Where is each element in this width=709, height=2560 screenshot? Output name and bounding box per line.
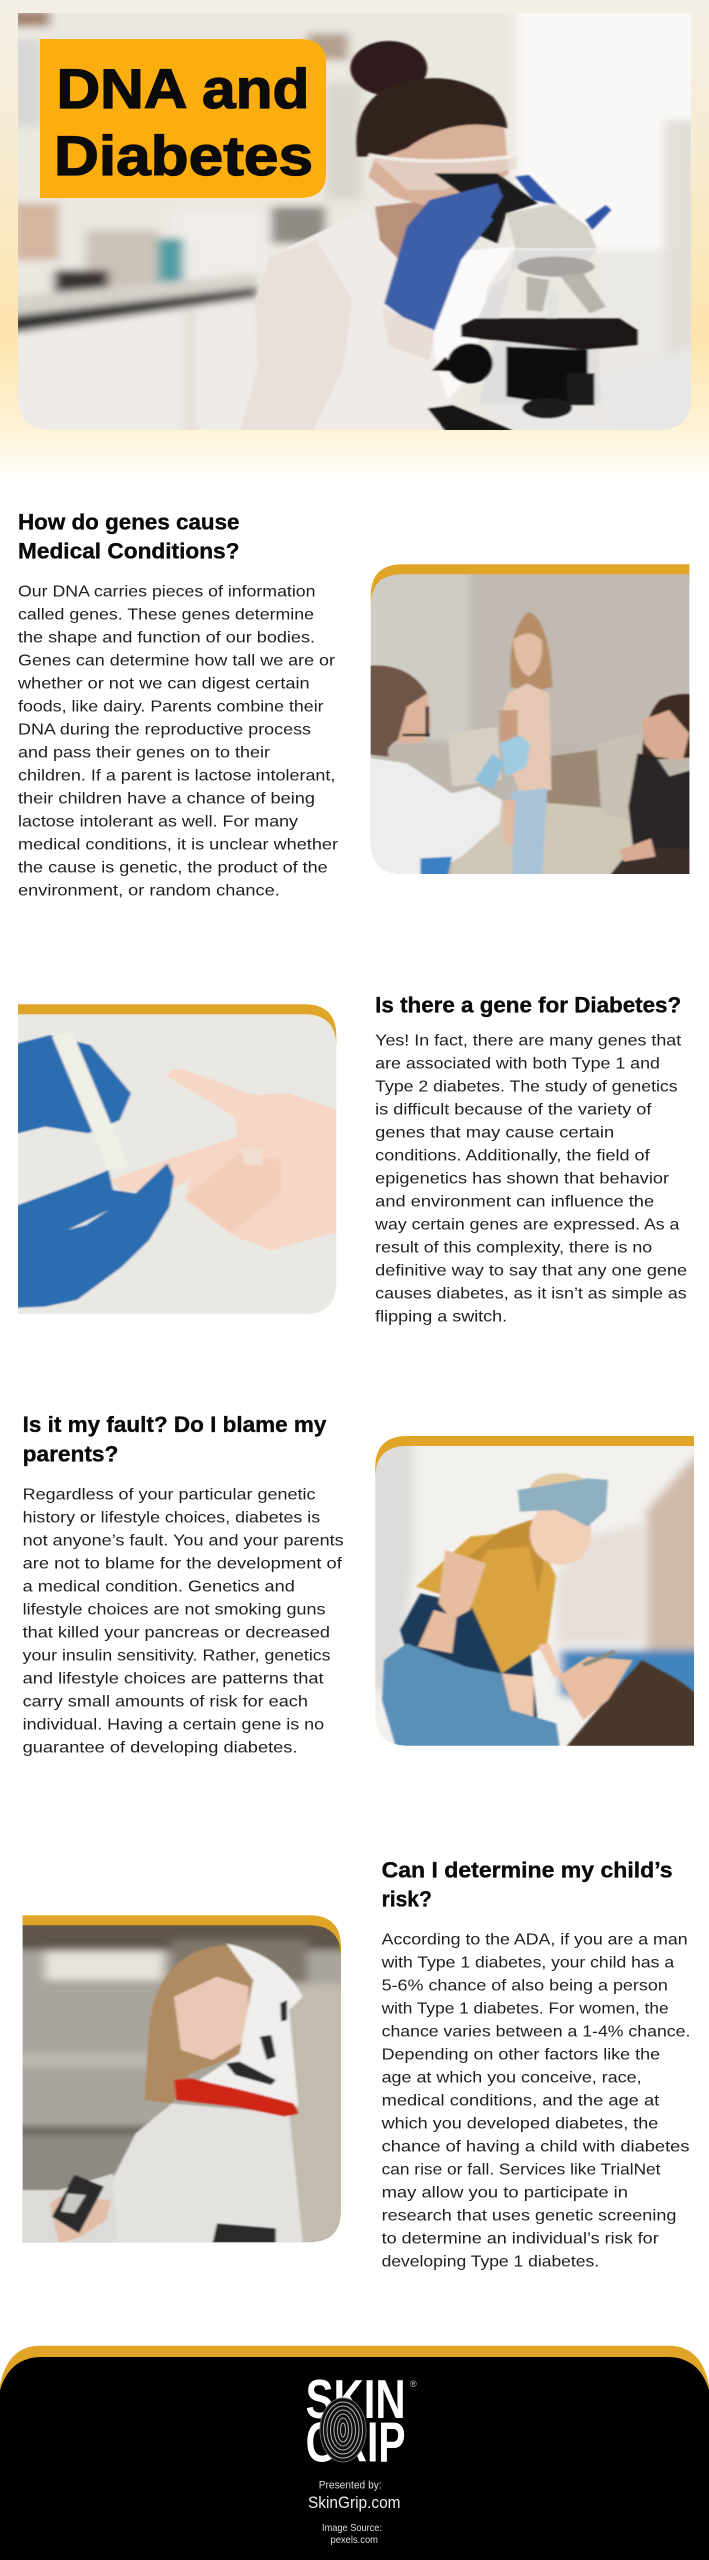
image source text: Image Source: xyxy=(322,2522,382,2534)
body text: chance of having a child with diabetes xyxy=(382,2139,690,2156)
body text: a medical condition. Genetics and xyxy=(23,1578,295,1595)
body text: may allow you to participate in xyxy=(382,2185,628,2202)
body text: definitive way to say that any one gene xyxy=(375,1263,687,1280)
body text: with Type 1 diabetes. For women, the xyxy=(381,2001,669,2018)
body text: environment, or random chance. xyxy=(18,883,280,900)
body text: and environment can influence the xyxy=(375,1194,654,1211)
heading xyxy=(18,509,239,564)
logo: Skin Grip xyxy=(306,2368,417,2475)
section 4: can I determine my child's risk xyxy=(5,1857,690,2271)
body text: DNA during the reproductive process xyxy=(18,722,311,739)
body text: genes that may cause certain xyxy=(375,1125,614,1142)
body text xyxy=(23,1486,344,1756)
body text: is difficult because of the variety of xyxy=(375,1102,652,1119)
body text: lifestyle choices are not smoking guns xyxy=(23,1601,325,1618)
body text: medical conditions, it is unclear whether xyxy=(18,837,339,854)
body text: age at which you conceive, race, xyxy=(382,2070,642,2087)
gold accent band xyxy=(371,564,689,604)
photo: finger prick with lancet xyxy=(18,1014,336,1314)
body text: your insulin sensitivity. Rather, genetics xyxy=(23,1647,331,1664)
heading xyxy=(23,1412,327,1466)
photo: doctor with girl and mother xyxy=(370,574,690,874)
body text: Genes can determine how tall we are or xyxy=(18,653,336,670)
gold accent band xyxy=(375,1436,694,1476)
body text: result of this complexity, there is no xyxy=(375,1240,652,1257)
body text: epigenetics has shown that behavior xyxy=(375,1171,670,1188)
website: SkinGrip.com xyxy=(308,2494,400,2512)
heading: Is it my fault? Do I blame my xyxy=(23,1412,327,1437)
body text: are associated with both Type 1 and xyxy=(375,1056,660,1073)
body text: According to the ADA, if you are a man xyxy=(382,1932,688,1949)
section 1: how do genes cause medical conditions xyxy=(17,509,709,900)
body text: way certain genes are expressed. As a xyxy=(374,1217,680,1234)
body text: foods, like dairy. Parents combine their xyxy=(18,699,324,716)
body text: carry small amounts of risk for each xyxy=(23,1693,308,1710)
body text xyxy=(374,1033,687,1326)
body text: Depending on other factors like the xyxy=(382,2047,660,2064)
body text: are not to blame for the development of xyxy=(23,1555,342,1572)
title text xyxy=(54,57,313,187)
heading: Medical Conditions? xyxy=(18,539,239,564)
body text xyxy=(380,1932,690,2271)
body text: research that uses genetic screening xyxy=(382,2208,676,2225)
hero background glow xyxy=(0,0,709,480)
body text: to determine an individual’s risk for xyxy=(382,2231,659,2248)
body text: causes diabetes, as it isn’t as simple as xyxy=(375,1286,687,1303)
body text: guarantee of developing diabetes. xyxy=(23,1739,297,1756)
heading: Can I determine my child’s xyxy=(382,1857,673,1882)
photo: mother lifting baby xyxy=(375,1446,694,1746)
gold accent band xyxy=(18,1004,336,1044)
gold footer band xyxy=(0,2346,709,2400)
heading xyxy=(382,1857,673,1912)
body text: the shape and function of our bodies. xyxy=(18,630,315,647)
body text: Yes! In fact, there are many genes that xyxy=(375,1033,682,1050)
body text: their children have a chance of being xyxy=(18,791,315,808)
body text: children. If a parent is lactose intolerant, xyxy=(18,768,335,785)
body text: medical conditions, and the age at xyxy=(382,2093,660,2110)
title label xyxy=(40,39,326,198)
title text: Diabetes xyxy=(54,124,313,187)
body text: can rise or fall. Services like TrialNet xyxy=(382,2162,661,2179)
heading: parents? xyxy=(23,1441,118,1466)
footer xyxy=(0,2346,709,2560)
body text: and pass their genes on to their xyxy=(18,745,271,762)
body text: the cause is genetic, the product of the xyxy=(18,860,328,877)
image source site: pexels.com xyxy=(330,2534,378,2546)
body text: Our DNA carries pieces of information xyxy=(18,584,316,601)
body text: chance varies between a 1-4% chance. xyxy=(382,2024,690,2041)
body text: and lifestyle choices are patterns that xyxy=(23,1670,324,1687)
hero photo: scientist at microscope xyxy=(18,13,691,430)
presented by text: Presented by: xyxy=(319,2480,382,2492)
body text: flipping a switch. xyxy=(375,1309,507,1326)
logo: Skin Grip: SKIN xyxy=(306,2368,406,2430)
body text: history or lifestyle choices, diabetes is xyxy=(23,1509,320,1526)
body text: not anyone’s fault. You and your parents xyxy=(23,1532,344,1549)
body text: lactose intolerant as well. For many xyxy=(18,814,298,831)
body text: individual. Having a certain gene is no xyxy=(23,1716,324,1733)
photo: girl with insulin pump xyxy=(22,1925,341,2242)
body text: called genes. These genes determine xyxy=(18,607,314,624)
heading: How do genes cause xyxy=(18,509,239,534)
body text: Regardless of your particular genetic xyxy=(23,1486,315,1503)
section 3: is it my fault xyxy=(23,1412,709,1760)
logo: Skin Grip: GRIP xyxy=(306,2411,406,2475)
heading: risk? xyxy=(382,1887,432,1912)
body text: 5-6% chance of also being a person xyxy=(382,1978,668,1995)
body text: that killed your pancreas or decreased xyxy=(23,1624,330,1641)
black footer panel xyxy=(0,2357,709,2560)
title text: DNA and xyxy=(56,57,310,120)
body text: whether or not we can digest certain xyxy=(17,676,310,693)
body text: which you developed diabetes, the xyxy=(380,2116,658,2133)
logo: Skin Grip: ® xyxy=(410,2379,417,2389)
heading: Is there a gene for Diabetes? xyxy=(375,992,681,1017)
body text: conditions. Additionally, the field of xyxy=(375,1148,650,1165)
body text xyxy=(17,584,339,900)
body text: developing Type 1 diabetes. xyxy=(382,2254,599,2271)
gold accent band xyxy=(23,1915,341,1955)
body text: with Type 1 diabetes, your child has a xyxy=(381,1955,674,1972)
icon: fingerprint xyxy=(320,2398,366,2462)
section 2: is there a gene for diabetes xyxy=(5,992,687,1326)
body text: Type 2 diabetes. The study of genetics xyxy=(375,1079,678,1096)
